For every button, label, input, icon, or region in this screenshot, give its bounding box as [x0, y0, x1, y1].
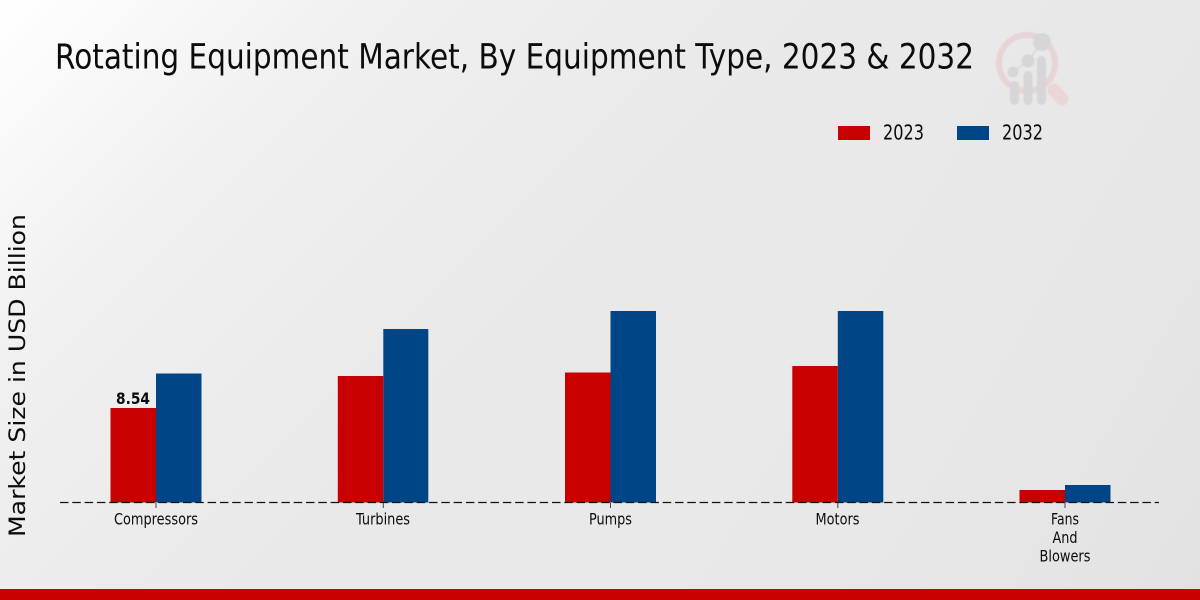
- x axis label: Fans And Blowers: Fans: [1051, 510, 1079, 528]
- footer bar: [0, 589, 1200, 600]
- legend item: 2023: [838, 120, 924, 144]
- legend item: 2023: 2023: [883, 120, 924, 144]
- icon: magnifier logo watermark: [999, 33, 1062, 105]
- bars: Pumps: [565, 311, 656, 502]
- x axis label: Pumps: Pumps: [589, 510, 632, 528]
- x axis label: Turbines: Turbines: [355, 510, 410, 528]
- bars: Compressors: [110, 374, 202, 502]
- x axis label: Compressors: Compressors: [114, 510, 198, 528]
- data label: 8.54: 8.54: [116, 389, 150, 408]
- bars: Fans And Blowers: [1020, 485, 1110, 502]
- bars: Turbines: [338, 329, 428, 502]
- y axis label: Market Size in USD Billion: [5, 214, 31, 537]
- legend item: 2032: 2032: [1002, 120, 1043, 144]
- legend: [838, 120, 1043, 144]
- x axis label: Fans And Blowers: And: [1052, 528, 1078, 547]
- bars: Motors: [792, 311, 883, 502]
- x axis label: Fans And Blowers: [1040, 510, 1090, 566]
- x axis label: Motors: Motors: [816, 510, 860, 528]
- legend item: 2032: [957, 120, 1043, 144]
- bar chart: [60, 311, 1159, 566]
- title: Rotating Equipment Market, By Equipment Type, 2023 & 2032: [55, 38, 974, 78]
- x axis label: Fans And Blowers: Blowers: [1040, 546, 1090, 566]
